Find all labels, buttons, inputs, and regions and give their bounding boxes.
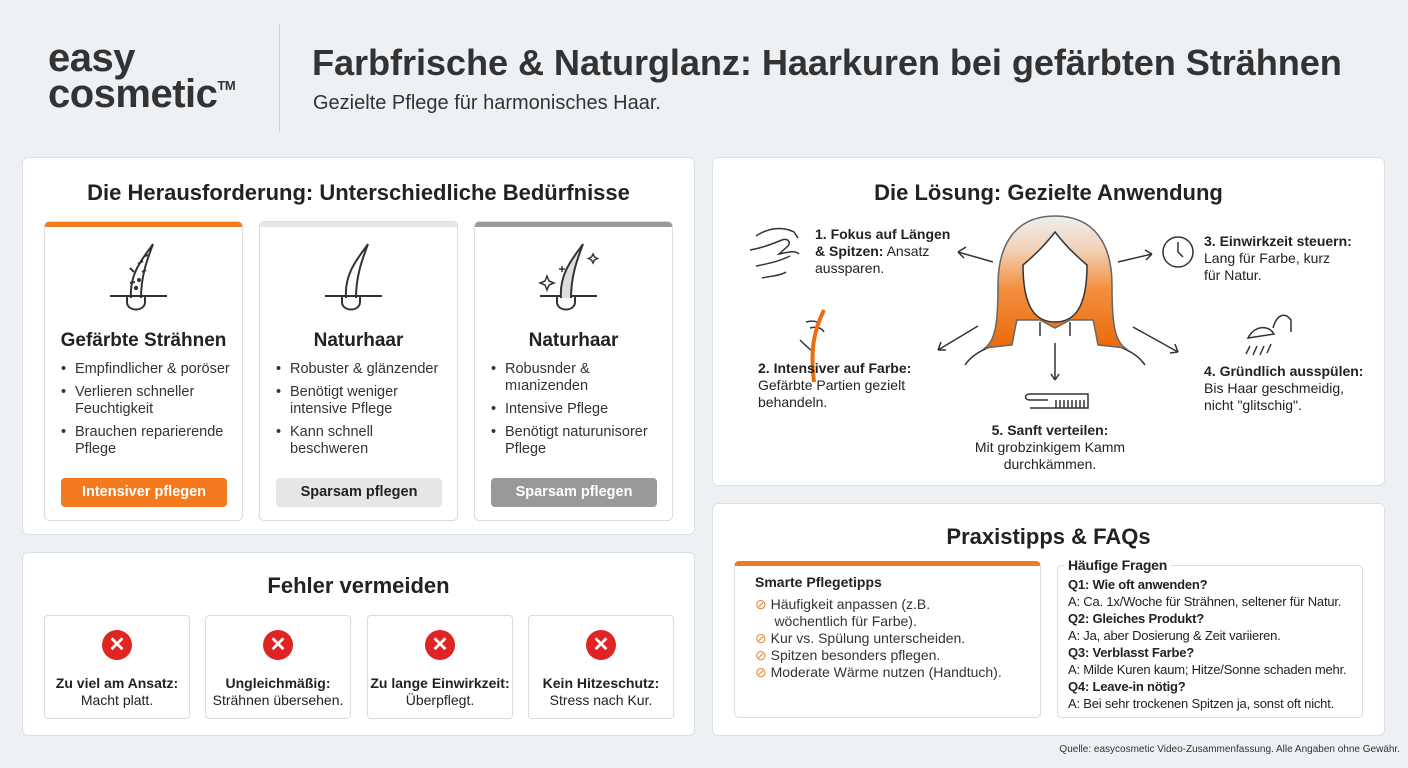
button: intensiver bbox=[61, 478, 227, 507]
card: natural hair: Benötigt weniger intensive Pflege bbox=[290, 384, 398, 417]
mistake 4: Stress nach Kur. bbox=[550, 692, 652, 708]
card: natural hair: Naturhaar bbox=[314, 330, 403, 351]
mistake 2: ✕ bbox=[270, 634, 286, 656]
box: FAQ: A: Ja, aber Dosierung & Zeit variieren. bbox=[1068, 628, 1281, 643]
heading: tips: Praxistipps & FAQs bbox=[946, 524, 1151, 549]
icon: hair bbox=[325, 244, 382, 310]
card: colored strands: Verlieren schneller Feuchtigkeit bbox=[75, 384, 194, 417]
logo bbox=[48, 36, 235, 116]
mistake 3: ✕ bbox=[432, 634, 448, 656]
heading: solution: Die Lösung: Gezielte Anwendung bbox=[874, 180, 1223, 205]
box: FAQ: A: Bei sehr trockenen Spitzen ja, sonst oft nicht. bbox=[1068, 696, 1334, 711]
card: natural hair 2: Naturhaar bbox=[529, 330, 618, 351]
comb bbox=[1026, 394, 1088, 408]
mistake 4 bbox=[528, 615, 674, 719]
card: natural hair: Robuster & glänzender bbox=[290, 361, 438, 377]
card: colored strands: Gefärbte Strähnen bbox=[61, 330, 226, 351]
logo: cosmeticTM bbox=[48, 72, 235, 116]
card: colored strands: Empfindlicher & poröser bbox=[75, 361, 230, 377]
step 2 bbox=[758, 360, 911, 410]
button: intensiver: Intensiver pflegen bbox=[82, 484, 206, 500]
heading: challenge: Die Herausforderung: Unterschiedliche Bedürfnisse bbox=[87, 180, 630, 205]
step 4: Bis Haar geschmeidig, bbox=[1204, 380, 1344, 396]
button: sparsam: Sparsam pflegen bbox=[301, 484, 417, 500]
box: FAQ: A: Milde Kuren kaum; Hitze/Sonne schaden mehr. bbox=[1068, 662, 1346, 677]
card: natural hair bbox=[259, 221, 458, 521]
panel: challenge bbox=[22, 157, 695, 535]
panel: mistakes bbox=[22, 552, 695, 736]
panel: solution bbox=[712, 157, 1385, 486]
icon: damaged hair bbox=[110, 244, 167, 310]
mistake 2: Strähnen übersehen. bbox=[213, 692, 343, 708]
hands bbox=[750, 229, 799, 278]
card: natural hair: Kann schnell beschweren bbox=[290, 424, 373, 457]
mistake 3: Überpflegt. bbox=[406, 692, 474, 708]
mistake 1 bbox=[44, 615, 190, 719]
box: smart tips: ⊘ Moderate Wärme nutzen (Handtuch). bbox=[755, 664, 1002, 680]
title: Farbfrische & Naturglanz: Haarkuren bei gefärbten Strähnen bbox=[312, 42, 1342, 83]
step 5: 5. Sanft verteilen: bbox=[992, 422, 1108, 438]
step 3: Lang für Farbe, kurz bbox=[1204, 250, 1330, 266]
step 2: Gefärbte Partien gezielt bbox=[758, 377, 905, 393]
step 4 bbox=[1204, 363, 1363, 413]
step 4: nicht "glitschig". bbox=[1204, 397, 1302, 413]
button: sparsam gray: Sparsam pflegen bbox=[516, 484, 632, 500]
box: FAQ bbox=[1057, 565, 1363, 718]
box: smart tips: ⊘ Spitzen besonders pflegen. bbox=[755, 647, 940, 663]
step 5 bbox=[975, 422, 1125, 472]
step 5: Mit grobzinkigem Kamm bbox=[975, 439, 1125, 455]
step 3: 3. Einwirkzeit steuern: bbox=[1204, 233, 1352, 249]
face bbox=[1023, 232, 1087, 322]
panel: tips & faq bbox=[712, 503, 1385, 736]
card: natural hair 2: Benötigt naturunisorer Pflege bbox=[505, 424, 648, 457]
step 2: behandeln. bbox=[758, 394, 827, 410]
card: colored strands: Brauchen reparierende Pflege bbox=[75, 424, 223, 457]
arrows bbox=[958, 247, 993, 262]
logo: easy bbox=[48, 36, 135, 80]
mistake 2 bbox=[205, 615, 351, 719]
box: FAQ: Q3: Verblasst Farbe? bbox=[1068, 645, 1194, 660]
hair bbox=[985, 216, 1125, 348]
box: smart tips: wöchentlich für Farbe). bbox=[774, 613, 917, 629]
mistake 1: ✕ bbox=[109, 634, 125, 656]
box: FAQ: Q4: Leave-in nötig? bbox=[1068, 679, 1186, 694]
box: FAQ: Häufige Fragen bbox=[1068, 557, 1167, 573]
step 1: aussparen. bbox=[815, 260, 884, 276]
clock bbox=[1163, 237, 1193, 267]
heading: mistakes: Fehler vermeiden bbox=[267, 573, 450, 598]
mistake 4: Kein Hitzeschutz: bbox=[543, 675, 659, 691]
icon: shiny hair bbox=[538, 244, 599, 310]
step 1: 1. Fokus auf Längen bbox=[815, 226, 950, 242]
card: natural hair 2: Robusnder & mıanizenden bbox=[505, 361, 590, 394]
mistake 4: ✕ bbox=[593, 634, 609, 656]
card: colored strands bbox=[44, 221, 243, 521]
mistake 1: Zu viel am Ansatz: bbox=[56, 675, 178, 691]
button: sparsam bbox=[276, 478, 442, 507]
button: sparsam gray bbox=[491, 478, 657, 507]
mistake 3: Zu lange Einwirkzeit: bbox=[370, 675, 510, 691]
illustration: head with hair and arrows bbox=[750, 215, 1292, 409]
step 3: für Natur. bbox=[1204, 267, 1262, 283]
card: natural hair 2 bbox=[474, 221, 673, 521]
mistake 1: Macht platt. bbox=[81, 692, 153, 708]
subtitle: Gezielte Pflege für harmonisches Haar. bbox=[313, 92, 661, 114]
shower bbox=[1248, 315, 1291, 338]
card: natural hair 2: Intensive Pflege bbox=[505, 401, 608, 417]
footer source: Quelle: easycosmetic Video-Zusammenfassung. Alle Angaben ohne Gewähr. bbox=[1059, 744, 1400, 755]
box: smart tips: ⊘ Häufigkeit anpassen (z.B. bbox=[755, 596, 930, 612]
step 4: 4. Gründlich ausspülen: bbox=[1204, 363, 1363, 379]
box: smart tips bbox=[734, 561, 1041, 718]
step 1: & Spitzen: Ansatz bbox=[815, 243, 929, 259]
mistake 2: Ungleichmäßig: bbox=[225, 675, 330, 691]
box: smart tips: ⊘ Kur vs. Spülung unterscheiden. bbox=[755, 630, 965, 646]
step 2: 2. Intensiver auf Farbe: bbox=[758, 360, 911, 376]
box: FAQ: Q1: Wie oft anwenden? bbox=[1068, 577, 1207, 592]
step 1 bbox=[815, 226, 950, 276]
box: FAQ: Q2: Gleiches Produkt? bbox=[1068, 611, 1204, 626]
box: smart tips: Smarte Pflegetipps bbox=[755, 574, 882, 590]
step 5: durchkämmen. bbox=[1004, 456, 1096, 472]
box: FAQ: A: Ca. 1x/Woche für Strähnen, seltener für Natur. bbox=[1068, 594, 1341, 609]
shoulders bbox=[965, 340, 1145, 365]
mistake 3 bbox=[367, 615, 513, 719]
step 3 bbox=[1204, 233, 1352, 283]
